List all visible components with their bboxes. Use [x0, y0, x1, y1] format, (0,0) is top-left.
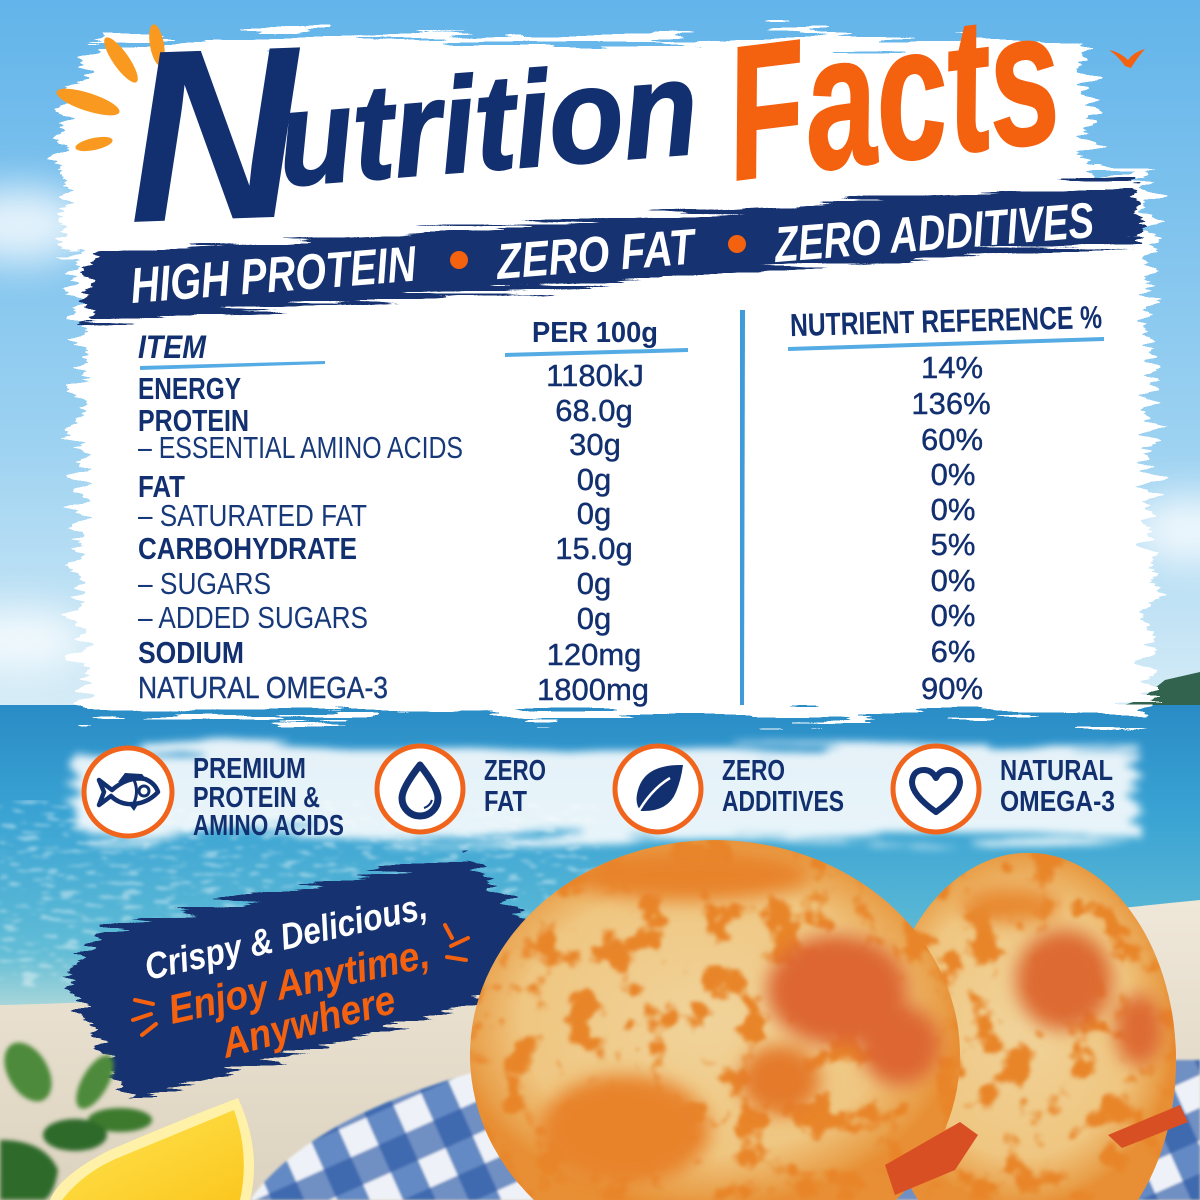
- text: zero fat: [484, 755, 546, 818]
- title: N: [122, 0, 309, 274]
- table: item column: PROTEIN: [138, 403, 249, 438]
- banner: high protein, zero fat, zero additives: ZERO ADDITIVES: [771, 192, 1096, 273]
- text: premium protein: PREMIUM: [193, 753, 306, 785]
- table: nutrient reference column: 0%: [931, 492, 975, 527]
- title: utrition: [272, 31, 703, 215]
- table: per 100g column: 120mg: [547, 637, 641, 672]
- table: item column: – SUGARS: [138, 566, 271, 601]
- table headers: ITEM: [138, 329, 207, 365]
- text: zero fat: FAT: [484, 786, 527, 818]
- table: nutrient reference column: 136%: [911, 386, 991, 421]
- table: item column: – ADDED SUGARS: [138, 600, 368, 635]
- table: per 100g column: 0g: [577, 601, 611, 636]
- table headers: PER 100g: [532, 317, 658, 349]
- image: leaves: [0, 1034, 152, 1200]
- table: item column: SODIUM: [138, 635, 244, 670]
- image: back cracker: [911, 852, 1188, 1200]
- table: item column: [138, 371, 463, 705]
- text: natural omega-3: NATURAL: [1000, 755, 1113, 787]
- image: front cracker: [460, 830, 978, 1200]
- icon: heart: [893, 746, 979, 832]
- divider: [740, 310, 745, 705]
- icon: fish: [84, 748, 172, 836]
- table: nutrient reference column: 0%: [931, 598, 975, 633]
- background: clouds: [0, 187, 1200, 670]
- panel: white brushed benefits band: [75, 748, 1135, 838]
- table: per 100g column: 68.0g: [555, 393, 633, 428]
- table: per 100g column: 1800mg: [537, 672, 649, 707]
- icon: sun rays: [54, 23, 168, 154]
- background: distant headland: [1095, 672, 1200, 716]
- text: natural omega-3: OMEGA-3: [1000, 786, 1115, 818]
- table headers: [138, 299, 1104, 370]
- table: per 100g column: 0g: [577, 496, 611, 531]
- table: per 100g column: 15.0g: [555, 531, 633, 566]
- text: premium protein: PROTEIN &: [193, 782, 320, 814]
- icon: leaf: [615, 746, 701, 832]
- background: sea: [0, 705, 1200, 1015]
- icon: seabird: [1109, 49, 1145, 68]
- panel: white brushed table background: [62, 38, 1150, 715]
- text: natural omega-3: [1000, 755, 1115, 818]
- table: item column: CARBOHYDRATE: [138, 531, 357, 566]
- table: item column: – SATURATED FAT: [138, 498, 367, 533]
- table: nutrient reference column: 5%: [931, 527, 975, 562]
- banner: high protein, zero fat, zero additives: [85, 183, 1142, 322]
- table: per 100g column: [537, 358, 649, 707]
- text: zero additives: [722, 755, 844, 818]
- table: nutrient reference column: 0%: [931, 563, 975, 598]
- table: item column: NATURAL OMEGA-3: [138, 670, 388, 705]
- icon: water drop: [377, 746, 463, 832]
- table: nutrient reference column: 14%: [921, 350, 983, 385]
- table: nutrient reference column: 6%: [931, 634, 975, 669]
- background: sand: [0, 900, 1200, 1200]
- banner: high protein, zero fat, zero additives: ZERO FAT: [493, 218, 700, 290]
- table: nutrient reference column: 60%: [921, 422, 983, 457]
- callout: crispy and delicious: Enjoy Anytime,: [164, 930, 434, 1033]
- table: per 100g column: 0g: [577, 462, 611, 497]
- background: sky: [0, 0, 1200, 720]
- text: premium protein: AMINO ACIDS: [193, 810, 344, 842]
- text: zero additives: ADDITIVES: [722, 786, 844, 818]
- callout: crispy and delicious: Crispy & Delicious,: [141, 885, 431, 988]
- background: checked cloth: [250, 1060, 1200, 1200]
- text: zero additives: ZERO: [722, 755, 785, 787]
- banner: high protein, zero fat, zero additives: HIGH PROTEIN: [128, 236, 419, 314]
- table: per 100g column: 1180kJ: [546, 358, 644, 393]
- table: item column: – ESSENTIAL AMINO ACIDS: [138, 430, 463, 465]
- callout: crispy and delicious: [62, 855, 530, 1100]
- callout: crispy and delicious: Anywhere: [216, 976, 400, 1067]
- text: premium protein: [193, 753, 344, 842]
- image: lemon: [50, 1098, 254, 1200]
- table: nutrient reference column: [911, 350, 991, 706]
- table: per 100g column: 30g: [569, 427, 621, 462]
- text: zero fat: ZERO: [484, 755, 546, 787]
- table: nutrient reference column: 0%: [931, 457, 975, 492]
- table headers: NUTRIENT REFERENCE %: [790, 299, 1102, 343]
- table: per 100g column: 0g: [577, 566, 611, 601]
- table: item column: FAT: [138, 469, 185, 504]
- table: nutrient reference column: 90%: [921, 671, 983, 706]
- title: [122, 0, 1072, 274]
- table: item column: ENERGY: [138, 371, 241, 406]
